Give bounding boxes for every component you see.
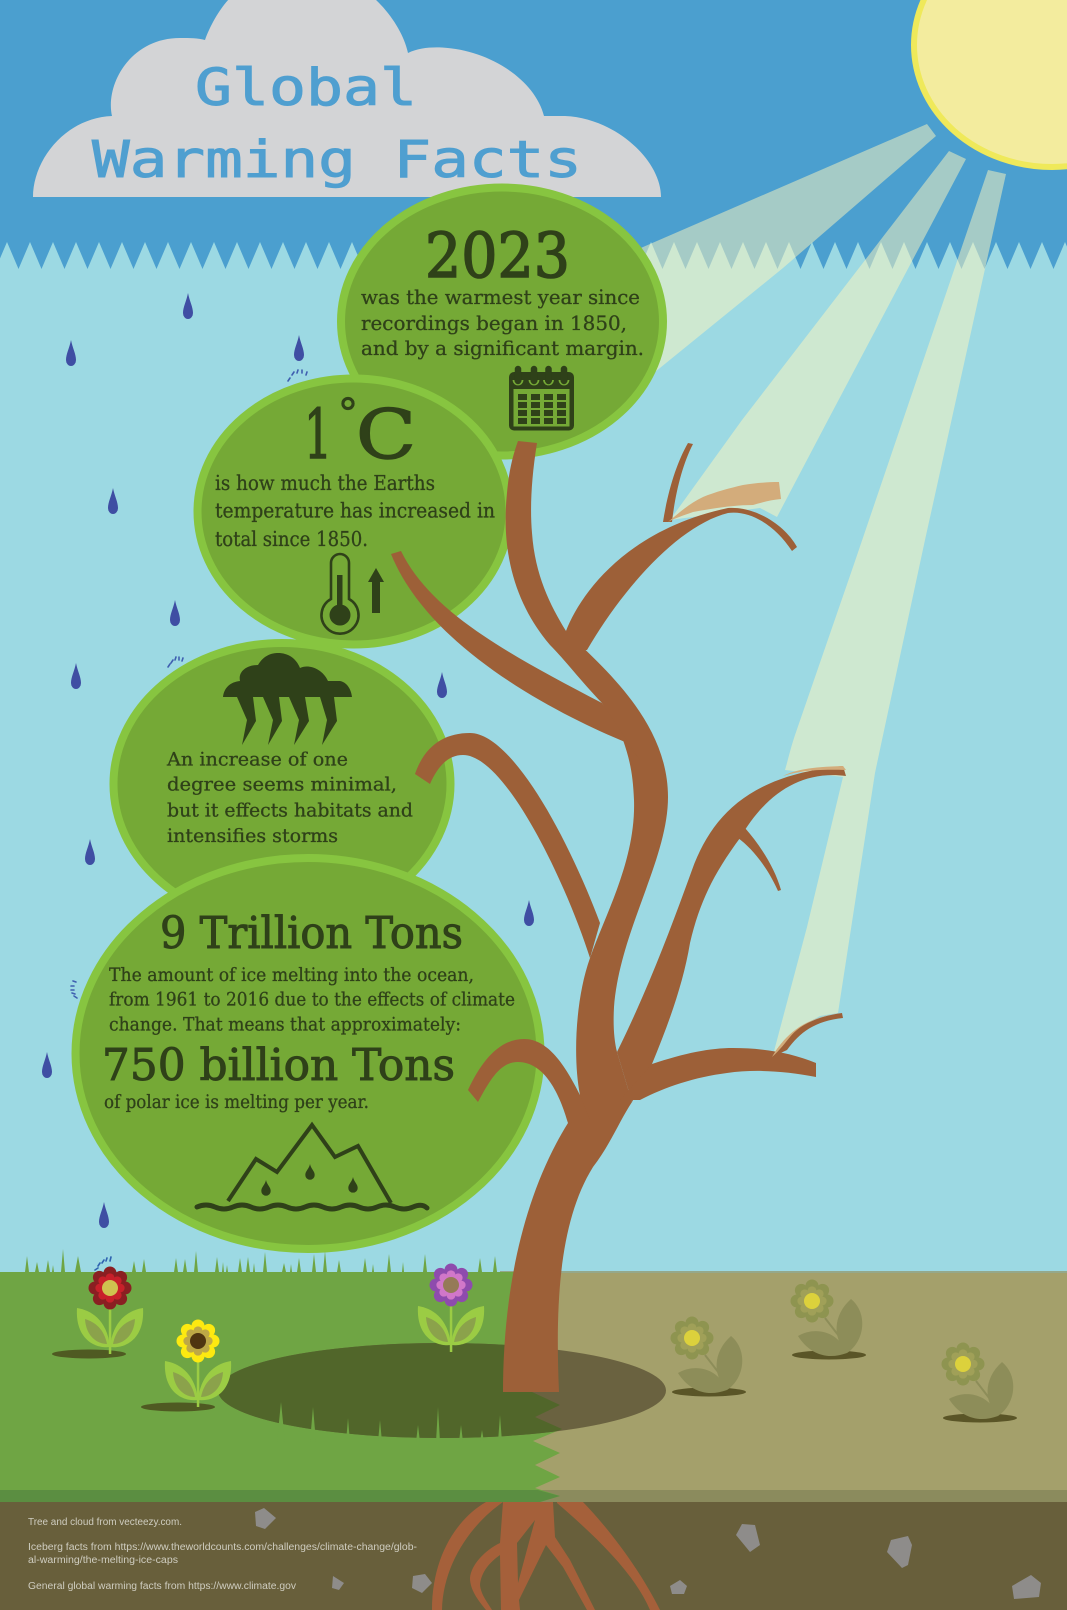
sunlit branch tips (668, 482, 846, 1057)
text: storm description: degree seems minimal, (167, 774, 397, 796)
lower sky (0, 242, 1067, 1282)
text: 1 degree description (215, 471, 495, 551)
title (92, 59, 582, 190)
twig: lower right (772, 1013, 843, 1057)
text: 2023 description: and by a significant margin. (361, 336, 644, 360)
credits: Iceberg facts from https://www.theworldcounts.com/challenges/climate-change/glob- (28, 1542, 417, 1553)
heading: 2023: 2023 (425, 219, 570, 292)
credits: General global warming facts from https://www.climate.gov (28, 1581, 296, 1592)
flower: yellow (141, 1320, 231, 1412)
text: 1 degree description: temperature has increased in (215, 498, 495, 522)
text: 2023 description (361, 285, 644, 360)
grass blades (25, 1249, 497, 1272)
icon: melting iceberg (197, 1125, 427, 1209)
heading: 1 degree C: ° (338, 389, 358, 438)
roots (432, 1502, 660, 1610)
text: 2023 description: was the warmest year since (361, 285, 640, 309)
text: polar ice per year: of polar ice is melting per year. (104, 1091, 369, 1113)
text: storm description: intensifies storms (167, 826, 338, 847)
panel: storm bubble (114, 643, 450, 925)
heading: 1 degree C: C (356, 396, 416, 475)
sun (914, 0, 1067, 167)
twig: top (663, 443, 693, 522)
wilted flower 3 (942, 1342, 1017, 1422)
wilted flower 2 (790, 1280, 866, 1360)
text: ice melt description: from 1961 to 2016 due to the effects of climate (109, 988, 515, 1010)
flower: red (52, 1266, 143, 1358)
credits (28, 1517, 417, 1592)
cloud with title (33, 0, 661, 197)
text: 1 degree description: total since 1850. (215, 527, 368, 551)
heading: 1 degree C: 1 (304, 396, 332, 475)
text: 2023 description: recordings began in 1850, (361, 311, 627, 335)
text: storm description: but it effects habitats and (167, 800, 413, 822)
branch: upper left (391, 551, 640, 760)
sky zigzag edge (0, 242, 1067, 269)
text: storm description: An increase of one (166, 750, 348, 770)
upper sky (0, 0, 1067, 260)
branch: lower right (620, 1048, 816, 1100)
text: storm description (166, 750, 413, 847)
text: 1 degree description: is how much the Earths (215, 471, 435, 495)
panel: ice melt bubble (76, 858, 540, 1249)
branch: mid left (415, 733, 600, 958)
branch: mid right (617, 766, 846, 1102)
wilted flower 1 (670, 1316, 746, 1396)
heading: 9 trillion tons: 9 Trillion Tons (160, 908, 463, 959)
credits: al-warming/the-melting-ice-caps (28, 1555, 178, 1566)
sun rays (590, 124, 1006, 1055)
text: ice melt description: change. That means that approximately: (109, 1014, 461, 1036)
branch: top right (566, 508, 797, 650)
text: ice melt description (109, 964, 515, 1036)
text: ice melt description: The amount of ice melting into the ocean, (109, 964, 474, 986)
trunk and main stem (503, 441, 668, 1392)
twig: mid right (738, 828, 781, 891)
title: Global (195, 59, 417, 118)
heading: 1 degree C (304, 389, 416, 475)
rocks (255, 1508, 1041, 1599)
icon: thermometer with arrow (322, 554, 384, 634)
heading: 750 billion tons: 750 billion Tons (102, 1040, 455, 1091)
panel: 2023 bubble (341, 188, 663, 456)
tree (391, 441, 846, 1392)
credits: Tree and cloud from vecteezy.com. (28, 1517, 182, 1528)
icon: storm cloud (223, 653, 352, 745)
panel: 1 degree bubble (198, 378, 510, 644)
title: Warming Facts (92, 131, 582, 190)
ground (0, 1271, 1067, 1610)
raindrops (42, 293, 534, 1228)
tree shadow hole (218, 1343, 666, 1442)
branch: lower left (468, 1039, 590, 1123)
icon: calendar (509, 369, 574, 430)
rain splashes (71, 370, 307, 1270)
flower: purple (418, 1264, 484, 1352)
